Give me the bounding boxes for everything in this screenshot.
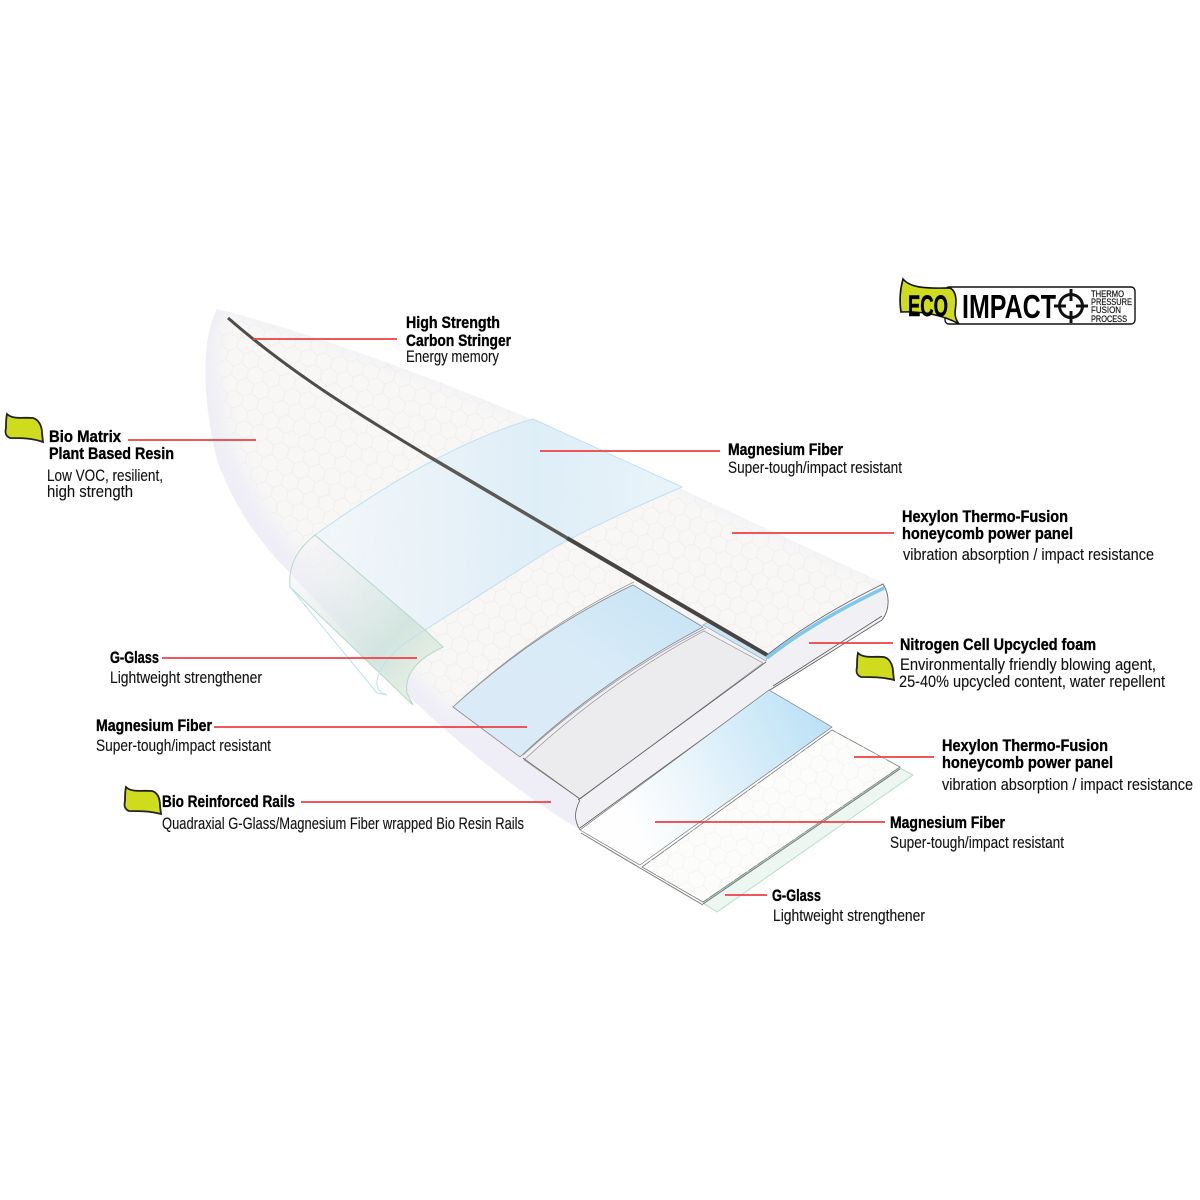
- callout: Hexylon top: Hexylon Thermo-Fusion: [902, 507, 1068, 526]
- icon: leaf for Bio Reinforced Rails: [124, 787, 161, 814]
- callout: G-Glass lower: [725, 886, 925, 925]
- callout: Magnesium Fiber left: [96, 716, 527, 755]
- callout: Hexylon lower: honeycomb power panel: [942, 753, 1113, 772]
- carbon stringer: [228, 318, 767, 655]
- callout: Hexylon top: vibration absorption / impact resistance: [903, 545, 1154, 564]
- callout: Bio Reinforced Rails: Bio Reinforced Rails: [162, 792, 295, 811]
- deck end skin with blue layer: [767, 588, 884, 658]
- lower hexylon panel: [642, 730, 900, 902]
- thin magnesium strip by stringer: [703, 622, 768, 661]
- logo tagline: [1091, 289, 1132, 324]
- callout: Nitrogen Cell foam: [809, 635, 1165, 691]
- callout: Magnesium Fiber left: Super-tough/impact resistant: [96, 736, 271, 755]
- lower magnesium panel: [580, 690, 832, 865]
- callout: Hexylon top: [732, 507, 1154, 564]
- callout: G-Glass left: G-Glass: [110, 648, 159, 667]
- callout: Magnesium Fiber lower: [655, 813, 1064, 852]
- exposed magnesium panel: [453, 585, 703, 757]
- callout: Magnesium Fiber lower: Magnesium Fiber: [890, 813, 1005, 832]
- callout: G-Glass left: [110, 648, 417, 687]
- rail edge line: [523, 758, 580, 799]
- callout: G-Glass left: Lightweight strengthener: [110, 668, 262, 687]
- board silhouette and rail: [205, 309, 888, 828]
- callout: High Strength Carbon Stringer: [253, 313, 511, 366]
- surfboard illustration: [205, 309, 913, 912]
- callout: Bio Matrix Plant Based Resin: [47, 427, 256, 501]
- callout: Bio Matrix Plant Based Resin: Plant Based Resin: [49, 444, 174, 463]
- callout: Magnesium Fiber left: Magnesium Fiber: [96, 716, 212, 735]
- logo word IMPACT: IMPACT: [962, 288, 1056, 325]
- logo frame: [945, 287, 1135, 324]
- callout: G-Glass lower: Lightweight strengthener: [773, 906, 925, 925]
- logo tagline: FUSION: [1091, 305, 1121, 315]
- foam strip: [576, 590, 888, 828]
- callout: Magnesium Fiber top: Magnesium Fiber: [728, 440, 843, 459]
- callout: High Strength Carbon Stringer: Carbon Stringer: [406, 331, 511, 350]
- logo leaf: [900, 279, 959, 324]
- icon: crosshair: [1054, 289, 1088, 323]
- magnesium fiber deck band: [315, 419, 682, 630]
- logo tagline: THERMO: [1091, 289, 1124, 299]
- hexylon deck panel: [228, 326, 874, 697]
- g-glass rail patch: [290, 535, 443, 705]
- icon: leaf for Bio Matrix: [5, 414, 43, 442]
- logo tagline: PRESSURE: [1091, 297, 1132, 307]
- logo: Eco Impact: [900, 279, 1135, 325]
- callout: Magnesium Fiber lower: Super-tough/impact resistant: [890, 833, 1064, 852]
- callout: Bio Matrix Plant Based Resin: Low VOC, resilient,: [47, 466, 163, 485]
- callout: High Strength Carbon Stringer: Energy memory: [406, 347, 499, 366]
- deck end outline: [767, 584, 888, 655]
- lower g-glass layer: [703, 768, 913, 912]
- callout: Bio Matrix Plant Based Resin: Bio Matrix: [49, 427, 121, 446]
- callout: G-Glass lower: G-Glass: [772, 886, 821, 905]
- lower board edges: [581, 769, 900, 905]
- panel edge highlight: [456, 582, 706, 755]
- callout: Magnesium Fiber top: Super-tough/impact resistant: [728, 458, 902, 477]
- callout: Nitrogen Cell foam: Environmentally friendly blowing agent,: [900, 655, 1156, 674]
- callout: Hexylon top: honeycomb power panel: [902, 524, 1073, 543]
- foam edge lines: [576, 616, 882, 830]
- callout: Magnesium Fiber top: [540, 440, 902, 477]
- callout: Hexylon lower: Hexylon Thermo-Fusion: [942, 736, 1108, 755]
- callout: Bio Reinforced Rails: [162, 792, 551, 833]
- exposed foam panel: [524, 631, 763, 799]
- magnesium rail wrap outline: [290, 587, 425, 695]
- callout: Bio Matrix Plant Based Resin: high strength: [47, 482, 133, 501]
- callout: Hexylon lower: [854, 736, 1193, 794]
- icon: leaf for Nitrogen Cell foam: [856, 653, 894, 680]
- logo tagline: PROCESS: [1091, 314, 1127, 324]
- callout: Bio Reinforced Rails: Quadraxial G-Glass/Magnesium Fiber wrapped Bio Resin Rails: [162, 814, 524, 833]
- logo word ECO: ECO: [908, 290, 948, 323]
- lower hexylon pattern: [642, 730, 900, 902]
- callout: High Strength Carbon Stringer: High Strength: [406, 313, 500, 332]
- callout: Nitrogen Cell foam: Nitrogen Cell Upcycled foam: [900, 635, 1096, 654]
